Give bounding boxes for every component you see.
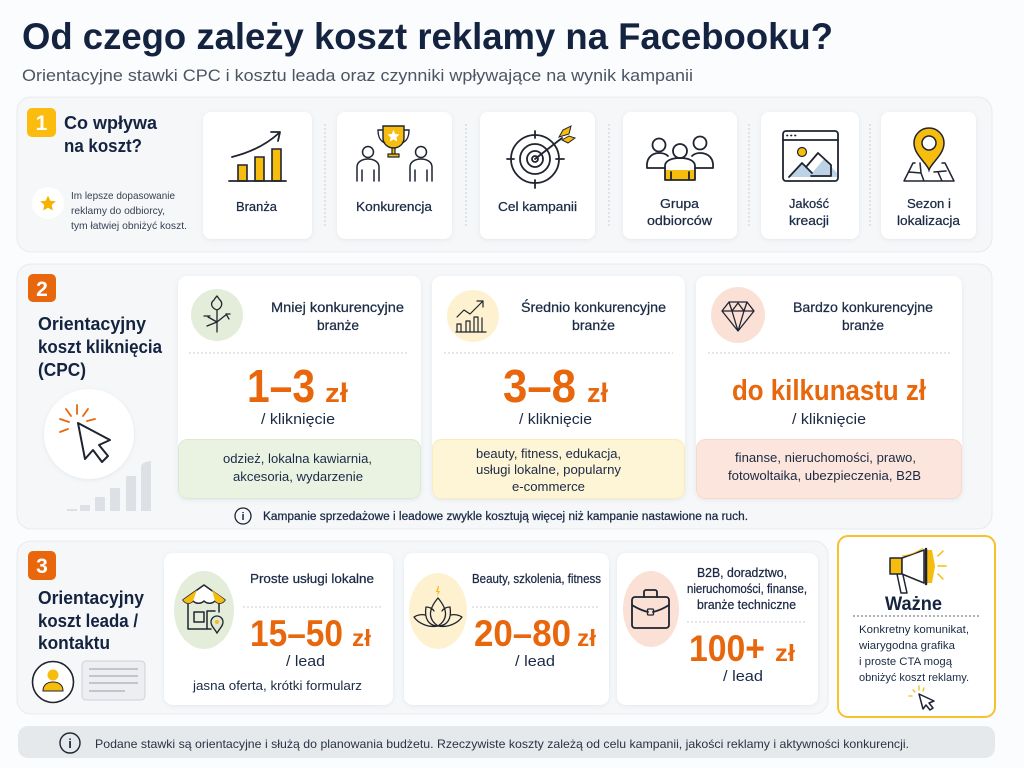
card: grupa odbiorców: odbiorców bbox=[647, 213, 713, 228]
text block: dopasowanie: reklamy do odbiorcy, bbox=[71, 205, 165, 217]
icon: shop bbox=[174, 571, 234, 649]
icon: plant bbox=[191, 289, 243, 341]
callout: ważne bbox=[838, 536, 995, 717]
text block: dopasowanie: tym łatwiej obniżyć koszt. bbox=[71, 220, 187, 232]
card: grupa odbiorców: Grupa bbox=[660, 196, 700, 211]
footer note bbox=[18, 726, 995, 758]
heading: orientacyjny koszt kliknięcia: Orientacyjny bbox=[38, 314, 146, 334]
value: do kilkunastu zł: do kilkunastu zł bbox=[732, 375, 926, 407]
heading: orientacyjny koszt kliknięcia: koszt kliknięcia bbox=[38, 337, 163, 357]
card: średnio konkurencyjne: branże bbox=[572, 317, 615, 333]
box: przykłady mniej konkurencyjne: akcesoria, wydarzenie bbox=[233, 470, 363, 484]
card: beauty szkolenia fitness bbox=[404, 553, 609, 705]
card: b2b: branże techniczne bbox=[697, 598, 796, 612]
card: branża bbox=[203, 112, 312, 239]
card: cel kampanii: Cel kampanii bbox=[498, 199, 577, 214]
text block: ważne bbox=[858, 624, 969, 684]
card: sezon i lokalizacja bbox=[881, 112, 976, 239]
card: jakość kreacji bbox=[761, 112, 859, 239]
card: b2b: B2B, doradztwo, bbox=[697, 566, 787, 580]
text block: ważne: Konkretny komunikat, bbox=[859, 624, 969, 636]
heading: orientacyjny koszt kliknięcia: (CPC) bbox=[38, 360, 86, 380]
heading: orientacyjny koszt leada bbox=[38, 588, 144, 653]
value: 3–8 zł: 3–8 bbox=[503, 360, 576, 412]
panel: koszt kliknięcia CPC bbox=[17, 264, 992, 529]
card: średnio konkurencyjne: / kliknięcie bbox=[519, 411, 592, 428]
heading: co wpływa na koszt: na koszt? bbox=[64, 135, 142, 156]
icon: form bbox=[82, 661, 145, 700]
box: przykłady bardzo konkurencyjne: finanse, nieruchomości, prawo, bbox=[735, 451, 916, 465]
card: cel kampanii bbox=[480, 112, 595, 239]
card: proste usługi lokalne: Proste usługi lokalne bbox=[250, 571, 374, 586]
value: 20–80 zł: zł bbox=[577, 625, 597, 651]
card: średnio konkurencyjne: Średnio konkurencyjne bbox=[521, 298, 666, 315]
footer note: i bbox=[68, 736, 72, 751]
icon: target bbox=[507, 126, 575, 188]
value: 15–50 zł: zł bbox=[352, 625, 372, 651]
panel: co wpływa na koszt bbox=[17, 97, 992, 252]
card: branża: Branża bbox=[236, 199, 278, 214]
card: średnio konkurencyjne bbox=[432, 276, 685, 499]
value: 15–50 zł: 15–50 bbox=[250, 613, 343, 654]
card: grupa odbiorców bbox=[623, 112, 737, 239]
icon: lotus bbox=[409, 573, 467, 649]
card: bardzo konkurencyjne bbox=[696, 276, 962, 499]
icon: chart trend bbox=[447, 290, 499, 342]
badge 3: 3 bbox=[36, 555, 48, 578]
text block: ważne: wiarygodna grafika bbox=[858, 640, 956, 652]
card: b2b bbox=[617, 553, 818, 705]
icon: megaphone bbox=[890, 548, 946, 593]
card: mniej konkurencyjne: branże bbox=[317, 317, 359, 333]
icon: click cursor bbox=[44, 389, 134, 479]
box: przykłady średnio konkurencyjne bbox=[432, 440, 684, 498]
icon: map pin bbox=[904, 128, 954, 181]
value: 100+ zł: zł bbox=[775, 640, 796, 666]
value: 100+ zł: 100+ bbox=[689, 628, 765, 669]
note: kampanie sprzedażowe bbox=[235, 508, 748, 524]
heading: orientacyjny koszt kliknięcia bbox=[38, 314, 163, 380]
card: b2b: nieruchomości, finanse, bbox=[687, 582, 807, 596]
icon: small cursor bbox=[909, 686, 934, 710]
card: sezon i lokalizacja: Sezon i bbox=[907, 196, 951, 211]
card: proste usługi lokalne: jasna oferta, krótki formularz bbox=[192, 679, 362, 693]
icon: growth chart bbox=[229, 132, 286, 181]
icon: trophy and competitors bbox=[357, 126, 432, 181]
badge 2: 2 bbox=[36, 278, 48, 301]
card: jakość kreacji: kreacji bbox=[789, 213, 829, 228]
card: konkurencja: Konkurencja bbox=[356, 199, 433, 214]
card: b2b: / lead bbox=[723, 668, 763, 685]
text block: ważne: obniżyć koszt reklamy. bbox=[859, 672, 969, 684]
value: 1–3 zł: zł bbox=[325, 378, 349, 408]
value: 3–8 zł: zł bbox=[587, 378, 608, 408]
card: sezon i lokalizacja: lokalizacja bbox=[897, 213, 961, 228]
badge 1: 1 bbox=[36, 112, 48, 135]
note: kampanie sprzedażowe: i bbox=[241, 511, 245, 523]
badge 1 bbox=[27, 108, 56, 137]
badge 3 bbox=[28, 551, 56, 580]
footer note: Podane stawki są orientacyjne i służą do planowania budżetu. Rzeczywiste koszty zależą od celu kampanii, jakości reklamy i aktywności konkurencji. bbox=[95, 737, 909, 751]
box: przykłady średnio konkurencyjne: e-commerce bbox=[512, 480, 585, 494]
callout: ważne: Ważne bbox=[885, 594, 942, 615]
icon: star bbox=[32, 187, 64, 219]
box: przykłady bardzo konkurencyjne: fotowoltaika, ubezpieczenia, B2B bbox=[728, 469, 921, 483]
card: mniej konkurencyjne bbox=[178, 276, 421, 499]
text block: ważne: i proste CTA mogą bbox=[859, 656, 953, 668]
icon: briefcase bbox=[623, 571, 679, 647]
box: przykłady średnio konkurencyjne: usługi lokalne, popularny bbox=[476, 463, 622, 477]
card: bardzo konkurencyjne: Bardzo konkurencyjne bbox=[793, 299, 933, 315]
heading: orientacyjny koszt leada: kontaktu bbox=[38, 633, 110, 653]
icon: audience group bbox=[647, 136, 713, 180]
heading: co wpływa na koszt bbox=[64, 112, 158, 156]
box: przykłady bardzo konkurencyjne bbox=[696, 440, 962, 498]
card: proste usługi lokalne bbox=[164, 553, 393, 705]
card: mniej konkurencyjne: / kliknięcie bbox=[261, 411, 335, 428]
heading: orientacyjny koszt leada: Orientacyjny bbox=[38, 588, 144, 608]
card: beauty szkolenia fitness: / lead bbox=[515, 653, 555, 670]
title: Od czego zależy koszt reklamy na Facebooku? bbox=[22, 16, 833, 57]
heading: co wpływa na koszt: Co wpływa bbox=[64, 112, 158, 133]
icon: signal bars bbox=[67, 461, 151, 511]
text block: dopasowanie bbox=[71, 190, 187, 232]
box: przykłady mniej konkurencyjne bbox=[178, 440, 420, 498]
card: mniej konkurencyjne: Mniej konkurencyjne bbox=[271, 299, 404, 315]
box: przykłady mniej konkurencyjne: odzież, lokalna kawiarnia, bbox=[223, 452, 372, 466]
card: bardzo konkurencyjne: / kliknięcie bbox=[792, 411, 866, 428]
text block: dopasowanie: Im lepsze dopasowanie bbox=[71, 190, 175, 202]
box: przykłady średnio konkurencyjne: beauty, fitness, edukacja, bbox=[476, 447, 621, 461]
card: konkurencja bbox=[337, 112, 452, 239]
note: kampanie sprzedażowe: Kampanie sprzedażowe i leadowe zwykle kosztują więcej niż kampanie nastawione na ruch. bbox=[263, 511, 748, 523]
icon: person bbox=[32, 662, 74, 702]
card: bardzo konkurencyjne: branże bbox=[842, 317, 884, 333]
icon: image window bbox=[783, 131, 838, 181]
value: 20–80 zł: 20–80 bbox=[474, 613, 571, 654]
badge 2 bbox=[28, 274, 56, 302]
panel: koszt leada bbox=[17, 541, 828, 714]
icon: diamond bbox=[711, 287, 765, 343]
value: 1–3 zł: 1–3 bbox=[247, 360, 315, 412]
heading: orientacyjny koszt leada: koszt leada / bbox=[38, 611, 138, 631]
card: proste usługi lokalne: / lead bbox=[286, 653, 325, 670]
card: beauty szkolenia fitness: Beauty, szkolenia, fitness bbox=[472, 572, 601, 586]
subtitle: Orientacyjne stawki CPC i kosztu leada oraz czynniki wpływające na wynik kampanii bbox=[22, 66, 693, 85]
card: jakość kreacji: Jakość bbox=[789, 196, 829, 211]
